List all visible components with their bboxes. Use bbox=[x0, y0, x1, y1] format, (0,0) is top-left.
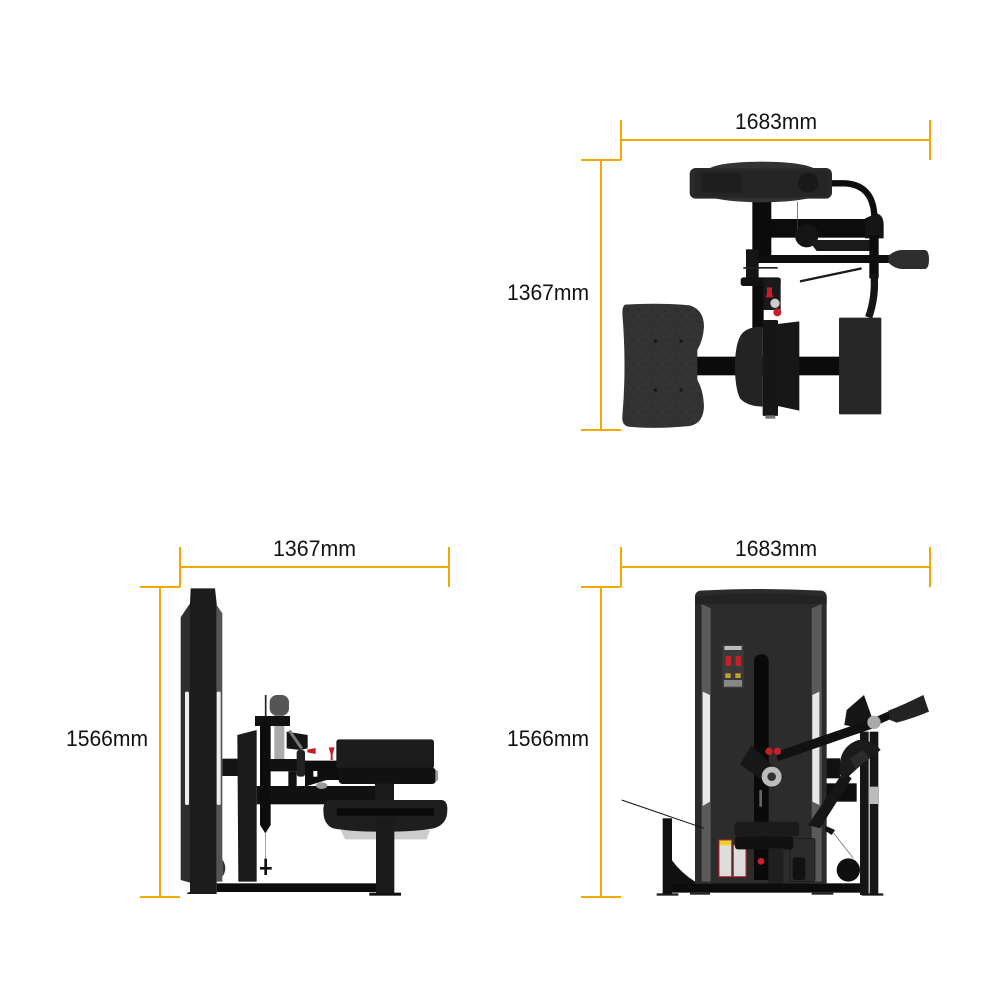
dimension: side view height line bbox=[140, 587, 180, 897]
grip end bbox=[270, 695, 289, 716]
foot plate bolts bbox=[654, 340, 683, 392]
label: front view width: 1683mm bbox=[735, 536, 817, 561]
warning label left bbox=[719, 840, 732, 877]
placard yellow icons bbox=[725, 673, 741, 678]
label: side view height: 1566mm bbox=[66, 726, 148, 751]
grip rod bbox=[875, 714, 892, 722]
seat pad bbox=[323, 800, 447, 832]
instruction placard bbox=[722, 645, 744, 688]
bottom mechanism outline bbox=[790, 838, 815, 882]
arm cable bbox=[833, 833, 853, 858]
red knob bbox=[773, 308, 781, 316]
label: top view depth: 1367mm bbox=[507, 280, 589, 305]
red pin vertical bbox=[329, 747, 335, 760]
seat pad bbox=[735, 327, 763, 407]
pivot knob bbox=[297, 750, 305, 777]
seat support bbox=[375, 783, 394, 802]
seat under plate bbox=[735, 837, 793, 849]
white strip right bbox=[812, 692, 819, 805]
roller cap bbox=[435, 771, 438, 781]
selector pin bbox=[758, 858, 764, 865]
pivot center bbox=[767, 772, 776, 781]
dimension: front view height line bbox=[581, 587, 621, 897]
placard small print bbox=[724, 680, 742, 687]
arm sector bbox=[839, 740, 881, 780]
seat post bbox=[376, 817, 394, 894]
weight stack rod bbox=[759, 790, 762, 807]
small cross plate bbox=[743, 267, 778, 269]
guide rod bbox=[263, 695, 268, 717]
diagonal brace bbox=[289, 731, 302, 748]
handle grip bbox=[888, 250, 929, 269]
main tower bbox=[187, 588, 217, 894]
rear frame lower bbox=[820, 783, 857, 802]
seat support post bbox=[768, 848, 783, 883]
horizontal beam bbox=[257, 786, 380, 804]
lower curved tube bbox=[869, 273, 874, 317]
foot plate edge bbox=[622, 800, 704, 828]
white strip left bbox=[703, 692, 710, 806]
column label bbox=[869, 787, 878, 804]
base rail bbox=[217, 883, 377, 892]
foot plate post bbox=[663, 818, 672, 894]
silver knob bbox=[316, 782, 327, 789]
panel: side view dimensions bbox=[66, 536, 449, 897]
tube joint block bbox=[865, 213, 884, 238]
weight stack slot bbox=[754, 654, 769, 880]
panel: front view dimensions bbox=[507, 536, 930, 897]
left grey side bbox=[702, 604, 711, 882]
tower top band bbox=[695, 593, 827, 604]
label: side view width: 1367mm bbox=[273, 536, 356, 561]
base feet bbox=[657, 893, 883, 896]
label: front view height: 1566mm bbox=[507, 726, 589, 751]
foot plate bbox=[622, 304, 704, 428]
grip bbox=[888, 695, 929, 723]
lower roller bbox=[339, 768, 436, 784]
seat back plate bbox=[778, 321, 799, 411]
dimension: side view width line bbox=[180, 547, 449, 587]
placard header bbox=[724, 646, 742, 650]
foot bbox=[369, 893, 401, 896]
red pin right bbox=[774, 748, 781, 755]
right grey side bbox=[812, 604, 822, 882]
central column bbox=[763, 320, 778, 416]
seat slot bbox=[337, 808, 434, 816]
selector plate bbox=[763, 278, 781, 310]
rear shell bbox=[181, 603, 190, 883]
right column left tube bbox=[860, 732, 869, 895]
white strip left bbox=[185, 692, 189, 805]
dimension: top view width line bbox=[621, 120, 930, 160]
pivot disc bbox=[795, 224, 818, 247]
curved tube bbox=[830, 183, 874, 217]
arm end cap bbox=[825, 826, 835, 835]
warning label right bbox=[733, 845, 746, 877]
pivot tube bbox=[269, 759, 305, 771]
hanging cable bbox=[796, 202, 798, 230]
illustration: machine top view bbox=[622, 162, 929, 428]
seat frame silver bbox=[341, 830, 430, 839]
top pad inner frame bbox=[695, 171, 828, 197]
diagonal rod bbox=[800, 268, 862, 281]
panel: top view dimensions bbox=[507, 109, 930, 430]
silver joint bbox=[867, 716, 881, 729]
rear frame upper bbox=[820, 758, 840, 778]
foot plate support bbox=[672, 860, 695, 884]
dimension: front view width line bbox=[621, 547, 930, 587]
silver shaft bbox=[274, 713, 284, 759]
bottom mechanism block bbox=[793, 857, 805, 880]
placard red muscle figures bbox=[726, 656, 741, 666]
centre panel bbox=[712, 608, 810, 883]
red pin horizontal bbox=[307, 748, 316, 754]
top pad dome bbox=[707, 162, 817, 202]
ROM sector plate bbox=[844, 695, 872, 728]
red pin left bbox=[765, 748, 773, 755]
silver knob bbox=[770, 299, 780, 308]
pivot bar bbox=[305, 761, 340, 787]
lower vertical post bbox=[752, 283, 764, 328]
brace plate bbox=[287, 732, 308, 750]
long lever bbox=[260, 722, 271, 833]
illustration: machine side view bbox=[181, 588, 447, 896]
right column right tube bbox=[870, 732, 878, 895]
vertical connector bbox=[869, 235, 879, 278]
adjuster knob bbox=[741, 277, 781, 286]
column cap bbox=[765, 415, 775, 419]
white strip right bbox=[217, 692, 221, 805]
warning label yellow header bbox=[720, 841, 731, 845]
arm sector inset bbox=[850, 750, 870, 768]
tower connector bbox=[222, 759, 239, 776]
tower body bbox=[695, 589, 827, 883]
horizontal lever bar bbox=[747, 255, 890, 263]
diagonal arm bbox=[808, 772, 852, 828]
red pin bbox=[766, 287, 773, 297]
leg roller bbox=[336, 739, 434, 769]
top pad rectangle panel bbox=[702, 173, 742, 193]
bar hole bbox=[313, 771, 317, 777]
arm bracket bbox=[255, 716, 290, 726]
upper vertical post bbox=[752, 200, 771, 256]
frame upright bbox=[237, 730, 257, 882]
seat pad bbox=[734, 822, 799, 837]
top pad bbox=[690, 168, 832, 199]
pivot drop block bbox=[288, 771, 297, 787]
left adjuster block bbox=[746, 249, 759, 279]
crossbar bbox=[697, 357, 840, 375]
silver pivot bbox=[762, 767, 782, 787]
leg roller bbox=[839, 318, 881, 414]
base rail bbox=[670, 883, 862, 893]
cable stop bbox=[260, 859, 272, 875]
dimension: top view depth line bbox=[581, 160, 621, 430]
label: top view width: 1683mm bbox=[735, 109, 817, 134]
pivot housing bbox=[740, 745, 783, 788]
upper horizontal arm bbox=[771, 219, 869, 238]
lower arm plate bbox=[808, 240, 870, 251]
top pad circle panel bbox=[798, 173, 818, 193]
rear wheel bbox=[222, 859, 225, 877]
front shell bbox=[217, 605, 222, 882]
illustration: machine front view bbox=[622, 589, 929, 896]
pulley bbox=[837, 858, 860, 882]
cable bbox=[264, 833, 266, 860]
lever arm bbox=[777, 723, 873, 757]
